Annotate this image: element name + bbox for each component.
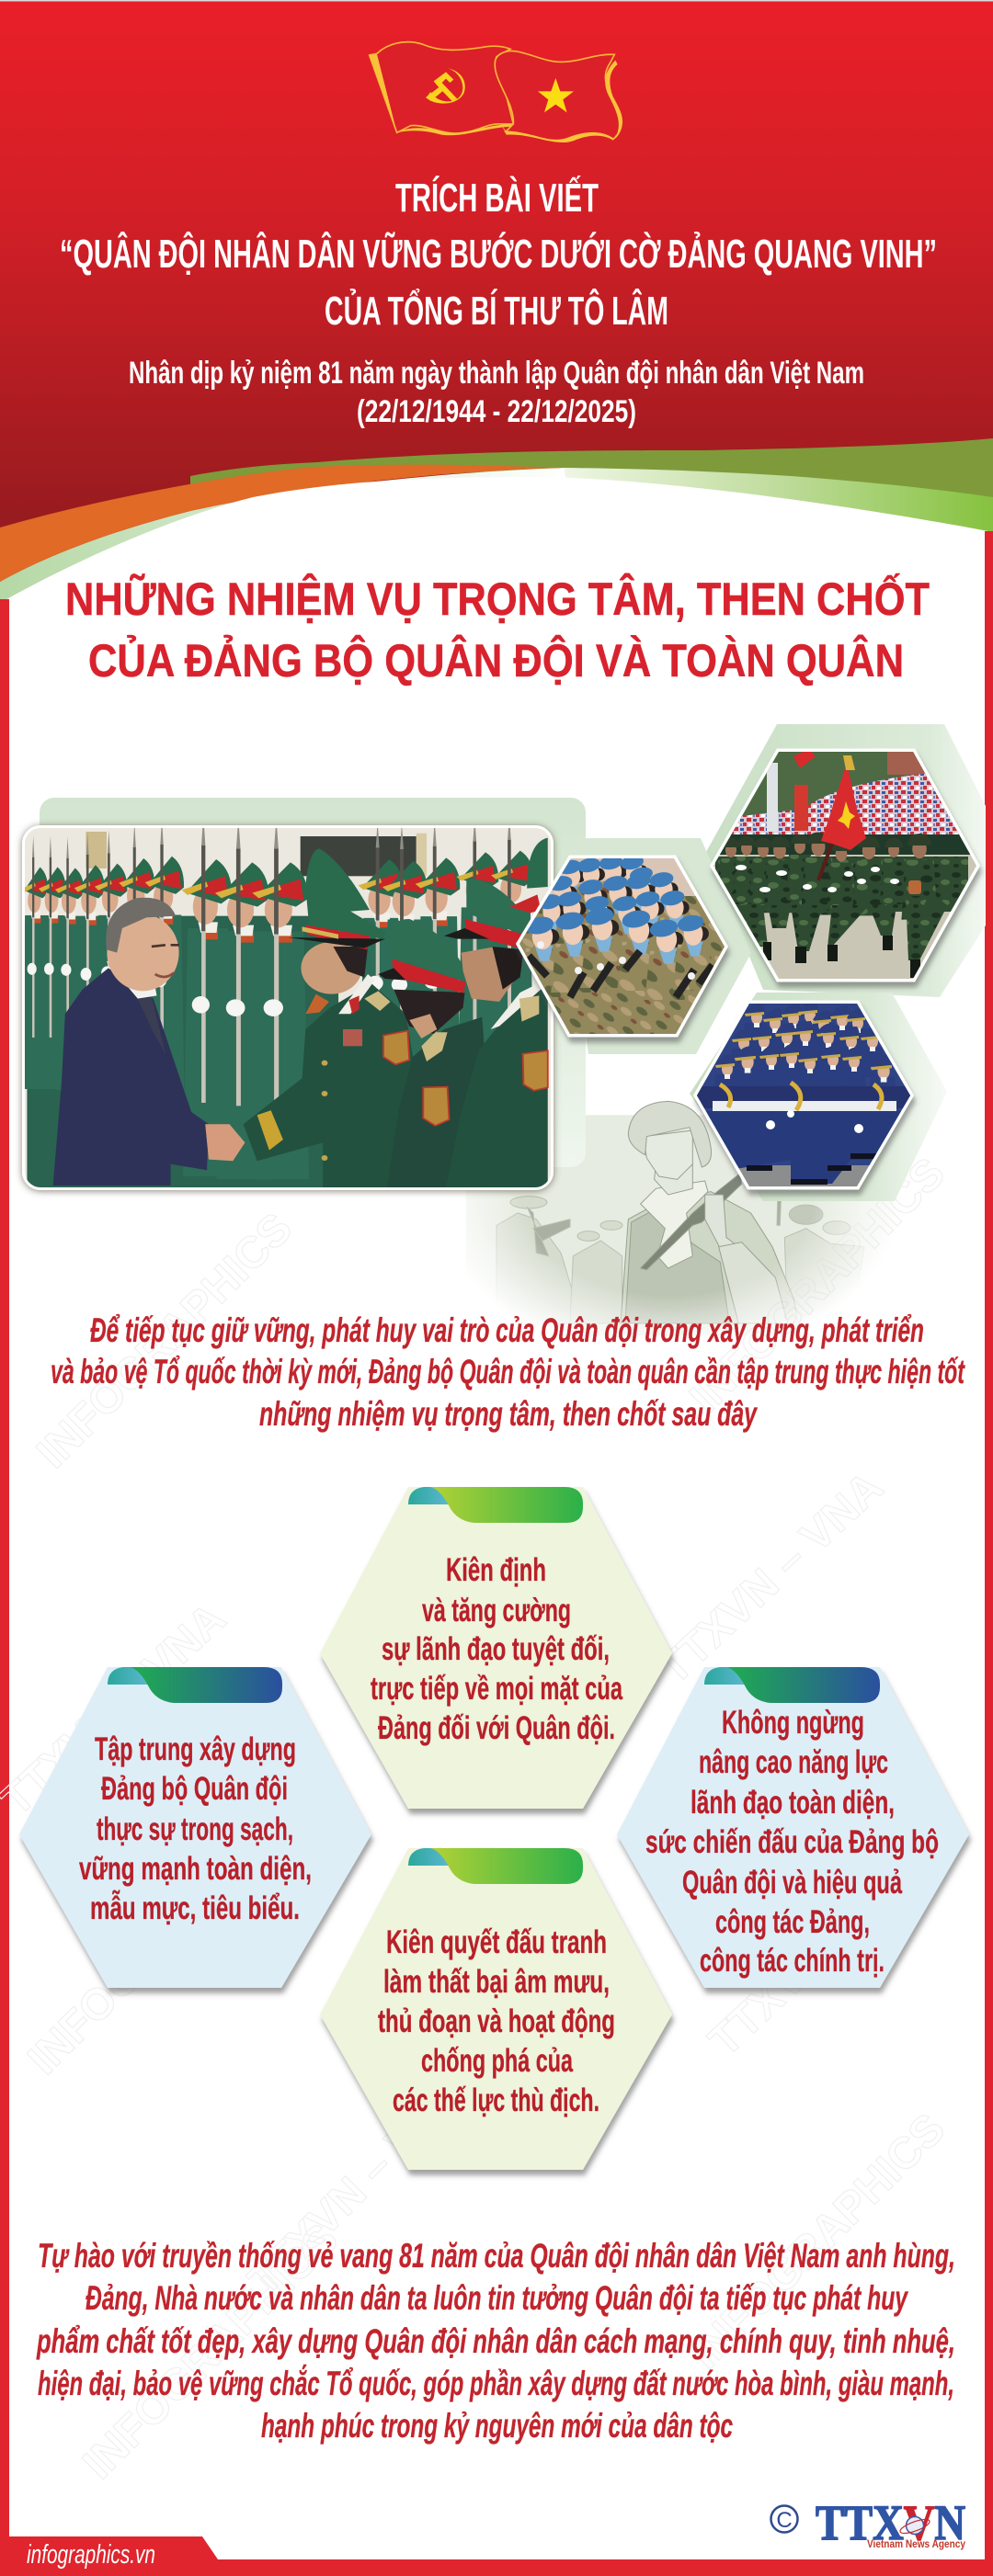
text: Kiên định [446,1552,546,1588]
footer source tab [0,2536,218,2576]
background watermarks: INFOGRAPHICS [74,2215,348,2489]
marching uniforms [694,1083,915,1185]
background watermarks: INFOGRAPHICS [28,1204,302,1478]
closing paragraph [36,2237,955,2445]
text: Tập trung xây dựng [95,1731,296,1767]
rows of navy caps [715,1008,892,1083]
icon: party and national flags [370,42,622,142]
photo: handshake with officers [18,815,561,1188]
text: các thế lực thù địch. [393,2082,599,2118]
marching soldiers [715,833,968,978]
intro paragraph [51,1311,965,1433]
photo: peacekeeper women unit [515,854,731,1038]
text: và tăng cường [422,1593,571,1628]
logo: TTXVN: Vietnam News Agency [867,2539,966,2550]
hexagon: task 4 bottom [320,1848,672,2170]
text [378,1924,615,2118]
icon: national flag [495,51,622,142]
background figures [496,1188,864,1323]
background watermarks: TTXVN – VNA [239,2068,476,2305]
footer source tab: infographics.vn [27,2540,155,2570]
hexagon: task 3 right [617,1667,969,1988]
text: thực sự trong sạch, [97,1811,293,1847]
logo: TTXVN: TTXVN [816,2495,965,2550]
text: trực tiếp về mọi mặt của [371,1671,622,1707]
saluted officer [244,848,417,1188]
logo: TTXVN: C [776,2508,793,2533]
background watermarks: TTXVN – VNA [700,1834,943,2066]
hexagon: task 2 left [19,1667,371,1988]
tab accent [704,1667,880,1703]
text [645,1705,939,1979]
rows of berets [520,854,713,1000]
text: Đảng bộ Quân đội [101,1771,288,1807]
intro paragraph: những nhiệm vụ trọng tâm, then chốt sau đây [259,1395,759,1433]
text: vững mạnh toàn diện, [79,1851,312,1887]
closing paragraph: hạnh phúc trong kỷ nguyên mới của dân tộc [261,2407,733,2445]
tab accent [408,1848,583,1884]
header band with swoosh [0,0,993,827]
honor guard row [22,815,534,1179]
title block: TRÍCH BÀI VIẾT [395,175,599,221]
background watermarks: INFOGRAPHICS [680,2105,954,2378]
text: nâng cao năng lực [699,1744,888,1780]
text: lãnh đạo toàn diện, [691,1785,895,1821]
text: mẫu mực, tiêu biểu. [90,1889,300,1926]
main figure [621,1101,798,1323]
main heading [65,573,930,687]
tab accent [408,1487,583,1523]
second officer [378,919,485,1188]
text: Kiên quyết đấu tranh [386,1924,607,1960]
photo: navy unit [690,1000,915,1193]
subtitle [129,356,864,429]
background watermarks [0,1149,954,2489]
text: chống phá của [421,2043,573,2079]
text: công tác chính trị. [700,1943,885,1979]
title block: CỦA TỔNG BÍ THƯ TÔ LÂM [325,287,668,334]
hexagon: task 1 top [320,1487,672,1809]
text [79,1731,312,1926]
text: sự lãnh đạo tuyệt đối, [382,1631,610,1667]
text: Đảng đối với Quân đội. [378,1710,615,1746]
icon: party flag [370,42,513,135]
text [371,1552,622,1746]
background watermarks: INFOGRAPHICS [680,1149,954,1423]
text: Không ngừng [722,1705,864,1741]
third officer [444,838,548,1188]
text: công tác Đảng, [715,1904,870,1940]
background watermarks: TTXVN – VNA [649,1462,893,1694]
red flag with star [818,755,866,880]
subtitle: (22/12/1944 - 22/12/2025) [357,394,636,429]
general secretary [53,898,245,1186]
photo: marching flag unit [708,749,984,983]
text: thủ đoạn và hoạt động [378,2003,615,2039]
title block [60,175,937,334]
background watermarks: INFOGRAPHICS [18,1810,292,2084]
tab accent [108,1667,282,1703]
illustration: soldiers sketch [466,1101,878,1335]
page red frame [0,531,993,2576]
text: làm thất bại âm mưu, [383,1964,610,2000]
photo backing panels [40,724,986,1201]
